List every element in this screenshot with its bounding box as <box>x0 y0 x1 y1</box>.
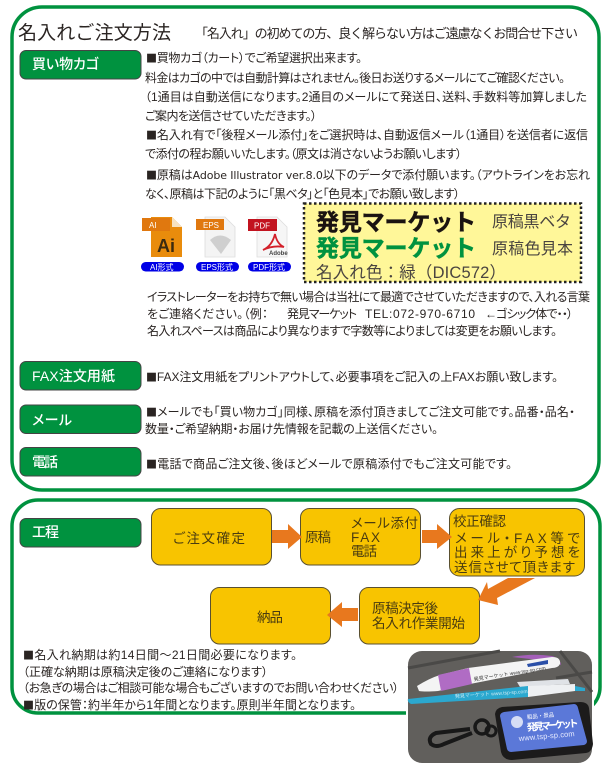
label: email <box>20 405 141 434</box>
flow box: production start: 原稿決定後 <box>372 601 438 616</box>
icon: EPS format: EPS <box>203 221 219 230</box>
arrow: to production <box>478 578 535 605</box>
cyan pen <box>408 679 585 704</box>
text block: shopping cart instructions: ご案内を送信させていただきます。） <box>145 108 317 123</box>
icon: PDF format: PDF <box>254 222 270 230</box>
flow box: proof check: メール・FAX等で <box>455 530 580 546</box>
text block: shopping cart instructions: ■買物カゴ（カート）でご希望選択出来ます。 <box>146 50 362 66</box>
subtitle: 「名入れ」の初めての方、良く解らない方はご遠慮なくお問合せ下さい <box>195 26 578 41</box>
text block: illustrator note: をご連絡ください。（例： <box>147 306 268 321</box>
text block: lead time and storage notes: （お急ぎの場合はご相談可能な場合もございますのでお問い合わせください） <box>23 680 399 695</box>
label: telephone: 電話 <box>32 454 58 470</box>
text block: lead time and storage notes: （正確な納期は原稿決定後のご連絡になります） <box>23 664 268 679</box>
panel: order methods <box>12 7 599 490</box>
callout: artwork colour samples: 原稿色見本 <box>492 240 573 258</box>
text block: illustrator note: 名入れスペースは商品により異なりますで字数等によりましては変更をお願いします。 <box>147 323 557 338</box>
icon: EPS format: EPS形式 <box>201 262 233 272</box>
text block: shopping cart instructions: ■原稿はAdobe Illustrator ver.8.0以下のデータで添付願います。（アウトラインをお忘れ <box>146 167 590 183</box>
text block: lead time and storage notes: ■名入れ納期は約14日間〜21日間必要になります。 <box>23 647 297 663</box>
text block: email instructions <box>145 404 575 436</box>
text block: shopping cart instructions <box>145 50 590 201</box>
label: fax form: FAX注文用紙 <box>32 368 115 384</box>
photo: printed pens and tag <box>406 649 594 765</box>
callout: artwork colour samples: 原稿黒ベタ <box>492 213 571 231</box>
callout: artwork colour samples: 名入れ色：緑（DIC572） <box>316 263 506 282</box>
title: 名入れご注文方法 <box>18 22 171 44</box>
icon: AI format: Ai <box>157 236 175 256</box>
icon: PDF format <box>248 217 291 272</box>
text block: shopping cart instructions: で添付の程お願いいたします。（原文は消さないようお願いします） <box>145 146 462 161</box>
label: shopping cart: 買い物カゴ <box>32 56 99 72</box>
flow box: artwork submission: メール添付 <box>351 516 418 531</box>
flow box: production start: 名入れ作業開始 <box>372 616 466 631</box>
icon: AI format: AI <box>149 221 157 230</box>
text block: fax instructions: ■FAX注文用紙をプリントアウトして、必要事項をご記入の上FAXお願い致します。 <box>146 369 558 385</box>
icon: AI format: AI形式 <box>150 262 174 272</box>
flow box: order confirmed <box>152 508 272 565</box>
cyan pen: 発見マーケット www.tsp-sp.com <box>455 688 528 700</box>
label: process <box>20 518 141 547</box>
icon: AI format <box>141 217 184 272</box>
text block: lead time and storage notes: ■版の保管：約半年から1年間となります。原則半年間となります。 <box>23 697 356 713</box>
arrow: to delivery <box>327 602 358 627</box>
panel: process <box>12 500 600 713</box>
blue key tag with clip <box>430 702 593 760</box>
text block: illustrator note: TEL:072-970-6710 <box>365 307 475 321</box>
icon: PDF format: PDF形式 <box>253 262 285 272</box>
text block: shopping cart instructions: なく、原稿は下記のように「黒ベタ」と「色見本」でお願い致します） <box>145 187 460 201</box>
flow box: order confirmed: ご注文確定 <box>173 531 245 546</box>
blue key tag with clip: 粗品・景品 <box>526 711 555 721</box>
label: fax form <box>20 362 141 390</box>
label: email: メール <box>32 412 72 428</box>
callout: artwork colour samples: 発見マーケット <box>316 209 476 235</box>
flow box: artwork submission: FAX <box>351 530 380 545</box>
text block: telephone instructions: ■電話で商品ご注文後、後ほどメールで原稿添付でもご注文可能です。 <box>146 456 512 472</box>
callout: artwork colour samples <box>304 204 581 282</box>
purple and white pen: 発見マーケット www.tsp-sp.com <box>473 665 546 683</box>
flow box: proof check: 校正確認 <box>453 514 506 529</box>
icon: EPS format <box>196 217 239 272</box>
text block: email instructions: ■メールでも「買い物カゴ」同様、原稿を添付頂きましてご注文可能です。品番・品名・ <box>146 404 575 420</box>
blue key tag with clip: www.tsp-sp.com <box>517 729 575 743</box>
text block: shopping cart instructions: 料金はカゴの中では自動計算はされません。後日お送りするメールにてご確認ください。 <box>145 70 565 85</box>
flow box: proof check <box>450 508 584 576</box>
flow box: proof check: 出来上がり予想を <box>454 545 580 560</box>
blue key tag with clip: 発見マーケット <box>526 717 579 734</box>
purple and white pen <box>417 655 561 692</box>
text block: illustrator note <box>147 289 590 338</box>
flow box: artwork submission: 電話 <box>351 544 378 559</box>
label: telephone <box>20 448 141 476</box>
callout: artwork colour samples: 発見マーケット <box>316 235 476 261</box>
icon: PDF format: Adobe <box>269 251 288 257</box>
arrow: to artwork <box>272 524 302 549</box>
flow box: artwork submission <box>300 508 420 565</box>
flow box: delivery: 納品 <box>257 610 283 625</box>
text block: email instructions: 数量・ご希望納期・お届け先情報を記載の上送信ください。 <box>145 421 438 436</box>
flow box: delivery <box>210 588 330 644</box>
label: process: 工程 <box>32 524 59 540</box>
text block: illustrator note: 発見マーケット <box>287 307 357 321</box>
text block: shopping cart instructions: （1通目は自動送信になります。2通目のメールにて発送日、送料、手数料等加算しました <box>145 89 587 104</box>
flow box: production start <box>360 588 480 644</box>
text block: shopping cart instructions: ■名入れ有で「後程メール添付」をご選択時は、自動返信メール（1通目）を送信者に返信 <box>146 127 588 143</box>
label: shopping cart <box>20 50 141 79</box>
flow box: artwork submission: 原稿 <box>305 530 331 545</box>
text block: illustrator note: ←ゴシック体で・・） <box>485 306 573 321</box>
text block: illustrator note: イラストレーターをお持ちで無い場合は当社にて最適でさせていただきますので、入れる言葉 <box>147 289 590 304</box>
flow box: proof check: 送信させて頂きます <box>454 560 575 575</box>
text block: lead time and storage notes <box>23 647 399 713</box>
arrow: to proof <box>422 524 452 549</box>
